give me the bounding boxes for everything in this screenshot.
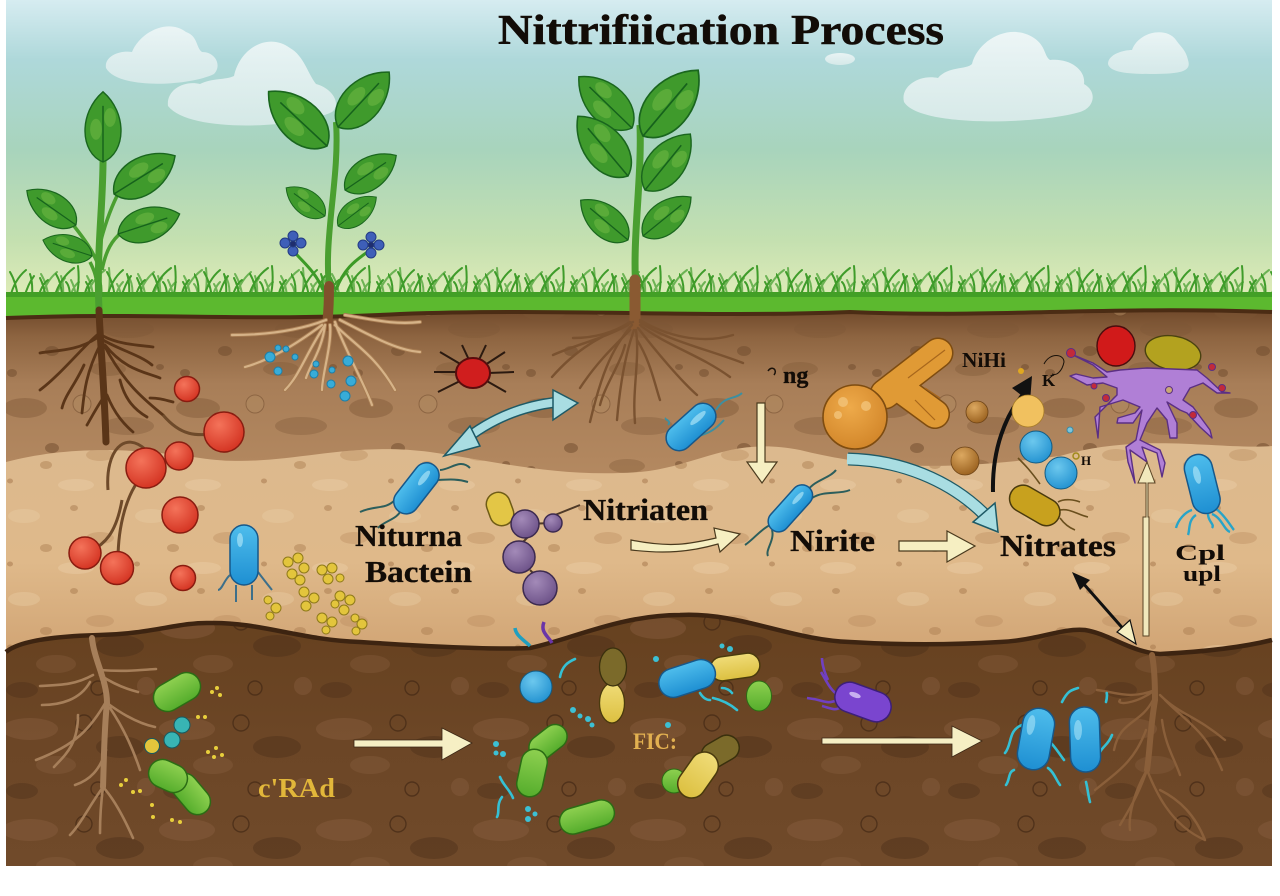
red mite — [434, 345, 514, 392]
label: Niturna Bacteria: Niturna — [355, 518, 462, 553]
green bacterium lower — [557, 797, 617, 837]
roots — [232, 286, 420, 405]
yellow dot — [1018, 368, 1024, 374]
purple organism — [1066, 326, 1230, 483]
arrow: cream tall vertical — [1138, 462, 1155, 636]
bottom left bacteria — [119, 667, 224, 824]
bacterium: blue upper centre — [661, 393, 742, 456]
yellow bacterium — [709, 652, 761, 682]
bottom central microbes — [493, 644, 772, 837]
label: ng: ng — [783, 363, 808, 389]
bacterium: blue Nirite — [745, 470, 850, 556]
cloud tiny — [825, 53, 855, 65]
plant 1 — [18, 92, 185, 442]
green bacteria pair — [524, 720, 572, 764]
bottom plant roots left — [36, 638, 156, 838]
label: c'RAd: c'RAd — [258, 773, 335, 803]
cloud right small — [1108, 32, 1189, 74]
teal filaments — [497, 659, 737, 817]
blue sphere — [520, 671, 552, 703]
bottom plant roots right — [1095, 655, 1225, 840]
yellow clusters — [264, 553, 367, 635]
arrow: bottom left cream — [354, 728, 472, 760]
flower stems — [293, 250, 370, 290]
arrow: cream down — [747, 403, 777, 483]
label: small H: H — [1081, 453, 1091, 468]
sky — [6, 0, 1272, 300]
plant 2 — [232, 59, 420, 405]
blue bacterium — [655, 656, 719, 701]
bacteria: blue pair bottom right — [1005, 688, 1112, 802]
red nodules — [69, 376, 244, 590]
label: NiHi: NiHi — [962, 348, 1006, 372]
blue spheres right — [1020, 431, 1077, 489]
label: Cpl upl: upl — [1183, 561, 1221, 586]
cloud left small — [106, 26, 218, 84]
olive and yellow cluster — [662, 769, 686, 793]
purple spheres and yellow bacterium — [483, 489, 580, 646]
label: Cpl upl — [1175, 540, 1225, 586]
label: Niturna Bacteria — [355, 518, 472, 589]
arrow: black double — [1072, 572, 1136, 644]
label: ng — [768, 363, 808, 389]
icon: blue flower right — [358, 232, 384, 258]
grass band — [6, 260, 1280, 320]
cloud left large — [168, 42, 336, 126]
arrow: teal curved to Nitrates — [847, 459, 998, 532]
label: Nirite: Nirite — [790, 523, 875, 558]
bacterium: golden — [1005, 458, 1088, 531]
icon: blue flower left — [280, 231, 306, 256]
green bacterium bottom — [166, 768, 216, 820]
small blue dot — [1067, 427, 1073, 433]
orange organism — [823, 350, 945, 449]
bacterium: blue (Niturna) — [360, 458, 470, 528]
plant 3 — [552, 56, 743, 423]
arrow: cream to Nirite — [631, 528, 740, 552]
soil: middle layer — [6, 443, 1272, 660]
label: small H — [1073, 453, 1091, 468]
arrow: cream to Nitrates — [899, 531, 975, 562]
roots — [552, 280, 743, 423]
bacterium: blue vertical left — [218, 525, 272, 602]
roots — [40, 310, 173, 442]
bacterium: purple — [807, 658, 895, 726]
olive and yellow bacterium — [600, 683, 624, 723]
label: Nitrates: Nitrates — [1000, 528, 1116, 563]
label: K — [1042, 356, 1064, 390]
pale amber sphere — [1012, 395, 1044, 427]
arrow: black curved up — [993, 376, 1032, 492]
water droplets — [265, 345, 356, 401]
cloud right large — [903, 32, 1093, 121]
soil: bottom layer — [6, 615, 1272, 866]
label: Cpl upl: Cpl — [1175, 540, 1225, 565]
title: Nittrifiication Process — [498, 8, 944, 54]
label: K: K — [1042, 371, 1056, 390]
arrow: bottom right cream — [822, 726, 982, 757]
stem — [98, 150, 103, 310]
amber spheres — [951, 401, 988, 475]
label: Niturna Bacteria: Bactein — [365, 554, 472, 589]
green bacterium top — [148, 667, 206, 717]
teal and yellow dots — [144, 717, 190, 754]
clouds — [106, 26, 1189, 125]
label: FIC:: FIC: — [633, 729, 677, 754]
label: Nitriaten: Nitriaten — [583, 492, 708, 527]
bacterium: blue right — [1176, 451, 1234, 535]
green ball — [746, 681, 772, 711]
soil: top layer — [6, 310, 1272, 495]
double arrow: teal curved — [444, 390, 578, 456]
